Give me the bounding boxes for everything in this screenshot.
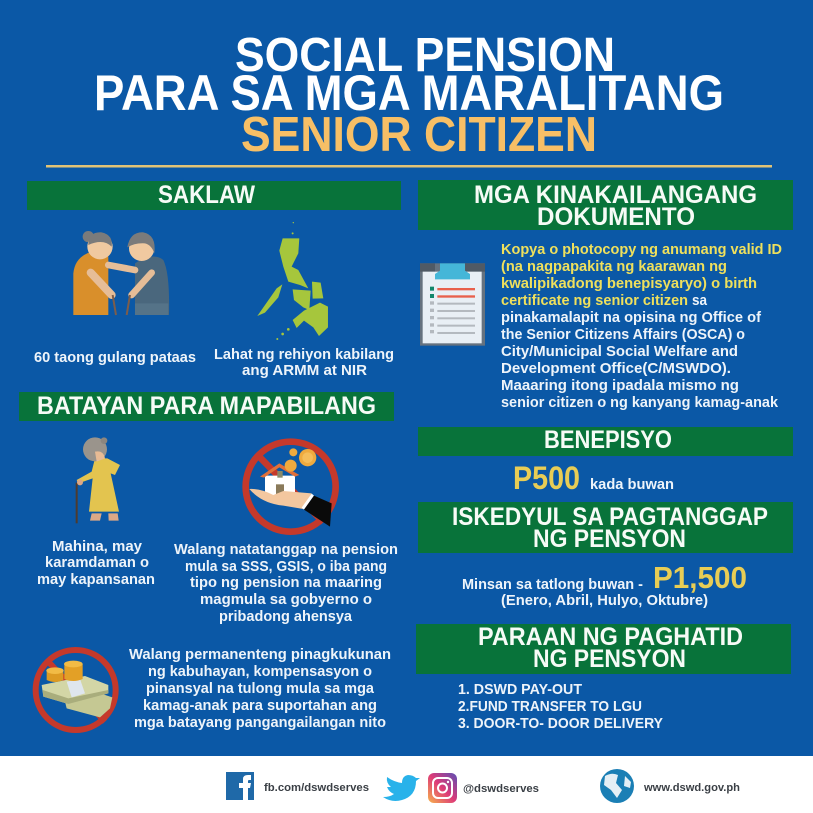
text: no livelihood: kamag-anak para suportahan ang <box>143 697 377 714</box>
icon: Philippines map <box>257 222 328 340</box>
text: documents: senior citizen o ng kanyang kamag-anak <box>501 394 779 411</box>
text: no livelihood <box>129 646 391 731</box>
text: delivery list <box>458 681 663 732</box>
text: instagram handle: @dswdserves <box>463 783 539 795</box>
text: documents: the Senior Citizens Affairs (OSCA) o <box>501 326 745 343</box>
text: delivery list: 1. DSWD PAY-OUT <box>458 681 582 698</box>
text: documents: kwalipikadong benepisyaryo) o birth <box>501 275 757 292</box>
text: documents <box>501 241 782 411</box>
text: coverage <box>214 346 394 379</box>
text: benefit amount <box>513 460 674 496</box>
text: no pension: pribadong ahensya <box>219 608 353 625</box>
text: delivery list: 2.FUND TRANSFER TO LGU <box>458 698 642 715</box>
icon: frail woman with cane <box>77 437 120 523</box>
title: SENIOR CITIZEN <box>241 108 597 162</box>
panel: documents heading: DOKUMENTO <box>537 203 695 231</box>
icon: instagram <box>428 773 457 803</box>
text: documents: Kopya o photocopy ng anumang valid ID <box>501 241 782 258</box>
icon: elderly couple <box>73 231 169 315</box>
title: PARA SA MGA MARALITANG <box>94 65 724 121</box>
panel: schedule heading: NG PENSYON <box>533 525 686 553</box>
panel: documents heading: MGA KINAKAILANGANG <box>474 181 757 209</box>
panel: saklaw: SAKLAW <box>158 181 255 209</box>
icon: no pension house in hand <box>246 442 336 532</box>
icon: globe <box>600 769 634 803</box>
text: schedule: Minsan sa tatlong buwan - <box>462 576 643 593</box>
title: SOCIAL PENSION <box>235 29 615 82</box>
panel: delivery heading: NG PENSYON <box>533 645 686 673</box>
panel: batayan: BATAYAN PARA MAPABILANG <box>37 392 376 420</box>
text: no pension: mula sa SSS, GSIS, o iba pang <box>185 558 387 575</box>
panel: benepisyo heading <box>418 426 793 456</box>
text: no livelihood: ng kabuhayan, kompensasyon o <box>148 663 372 680</box>
icon: facebook <box>226 772 254 800</box>
text: coverage: Lahat ng rehiyon kabilang <box>214 346 394 363</box>
text: coverage: ang ARMM at NIR <box>242 362 367 379</box>
text: frail: Mahina, may <box>52 538 143 555</box>
panel: documents heading <box>418 180 793 231</box>
text: frail: karamdaman o <box>45 554 149 571</box>
icon: no money <box>36 650 116 730</box>
text: no pension: Walang natatanggap na pension <box>174 541 398 558</box>
text: no livelihood: pinansyal na tulong mula sa mga <box>146 680 375 697</box>
text: documents: City/Municipal Social Welfare and <box>501 343 738 360</box>
text: documents: Maaaring itong ipadala mismo ng <box>501 377 739 394</box>
panel: benepisyo heading: BENEPISYO <box>544 426 672 454</box>
panel: saklaw <box>27 181 401 210</box>
panel: delivery heading <box>416 623 791 674</box>
panel: delivery heading: PARAAN NG PAGHATID <box>478 623 743 651</box>
text: no pension <box>174 541 398 625</box>
text: documents: Development Office(C/MSWDO). <box>501 360 731 377</box>
text: no livelihood: Walang permanenteng pinagkukunan <box>129 646 391 663</box>
text: schedule: P1,500 <box>653 560 747 595</box>
text: schedule: (Enero, Abril, Hulyo, Oktubre) <box>501 592 708 609</box>
text: frail: may kapansanan <box>37 571 155 588</box>
footer <box>0 756 813 813</box>
text: facebook handle: fb.com/dswdserves <box>264 782 369 794</box>
text: documents: (na nagpapakita ng kaarawan ng <box>501 258 727 275</box>
text: website: www.dswd.gov.ph <box>643 782 740 794</box>
text: no livelihood: mga batayang pangangailangan nito <box>134 714 386 731</box>
text: documents: pinakamalapit na opisina ng Office of <box>501 309 762 326</box>
title <box>94 29 724 162</box>
text: documents: certificate ng senior citizen <box>501 292 688 309</box>
text: benefit amount: kada buwan <box>590 476 674 493</box>
text: documents: sa <box>692 292 708 309</box>
text: age: 60 taong gulang pataas <box>34 349 196 366</box>
text: frail <box>37 538 155 588</box>
panel: schedule heading: ISKEDYUL SA PAGTANGGAP <box>452 503 768 531</box>
text: no pension: magmula sa gobyerno o <box>200 591 372 608</box>
icon: twitter <box>383 775 420 801</box>
text: no pension: tipo ng pension na maaring <box>190 574 382 591</box>
text: benefit amount: P500 <box>513 460 580 496</box>
text: delivery list: 3. DOOR-TO- DOOR DELIVERY <box>458 715 663 732</box>
text: schedule <box>462 560 747 609</box>
panel: schedule heading <box>418 502 793 553</box>
icon: clipboard <box>420 263 485 346</box>
